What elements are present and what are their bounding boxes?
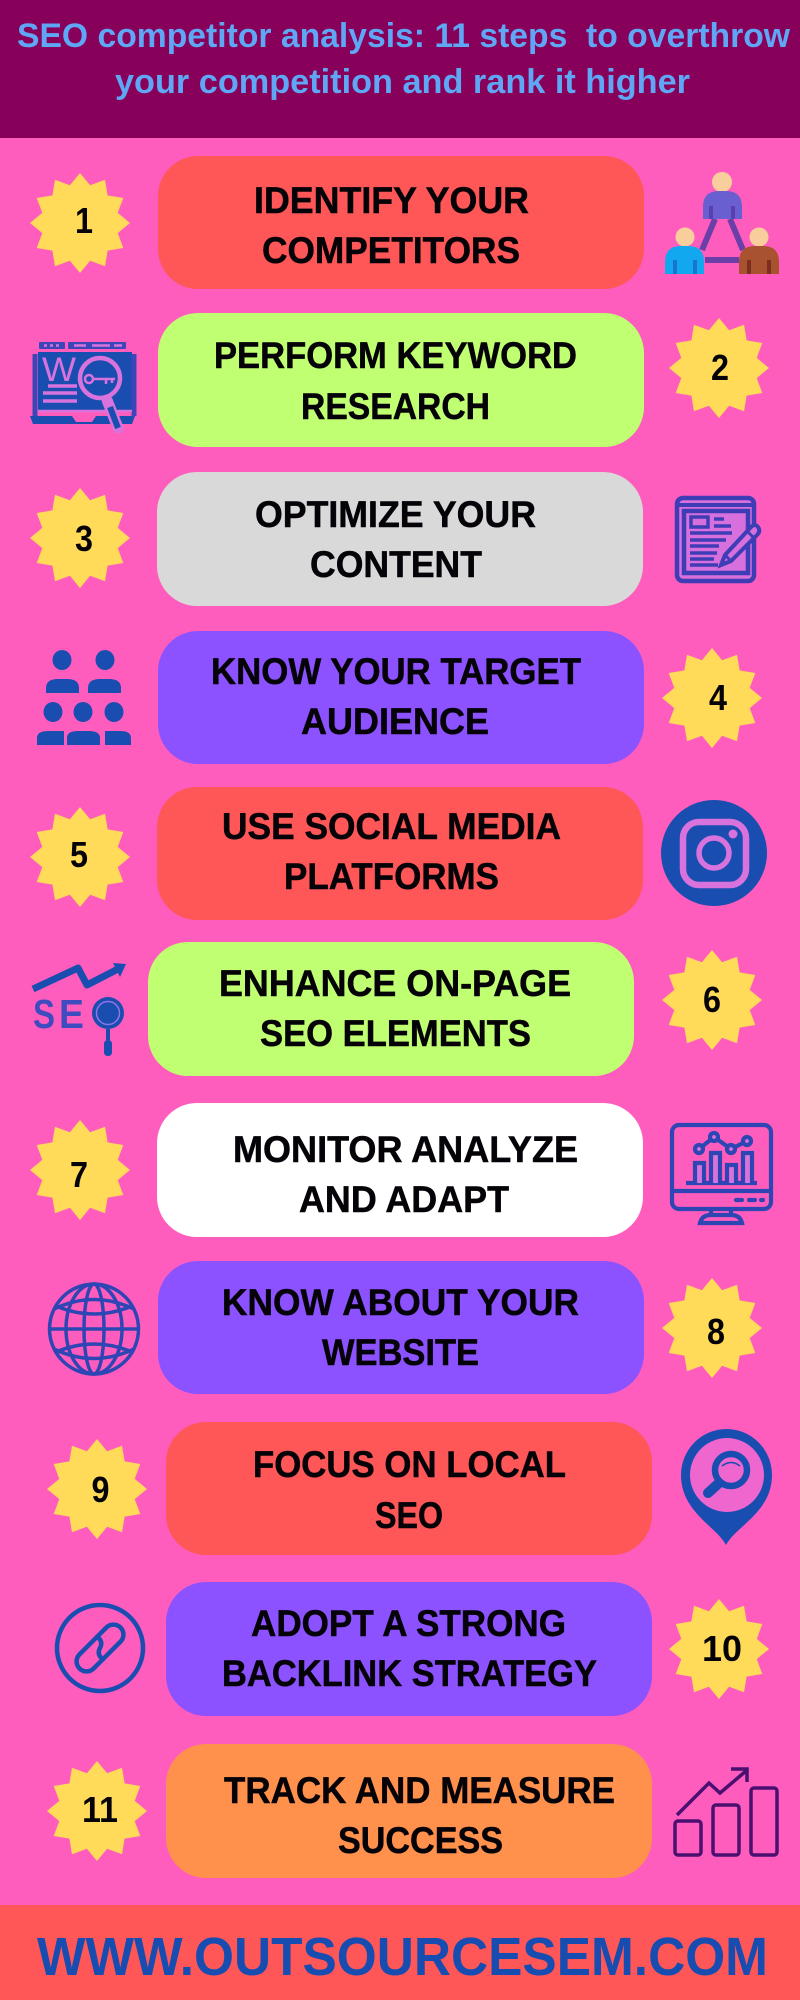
icon: growth bar chart (675, 1769, 777, 1855)
icon: location pin with magnifier (681, 1429, 772, 1545)
step 2 (30, 313, 769, 447)
number badge 10 (669, 1599, 769, 1699)
step 10 (57, 1582, 769, 1716)
pill: track and measure success (166, 1744, 652, 1878)
pill: use social media platforms (157, 787, 643, 920)
number badge 9 (47, 1439, 147, 1539)
pill: know about your website: KNOW ABOUT YOUR (222, 1282, 579, 1323)
pill: monitor analyze and adapt (157, 1103, 643, 1237)
step 8 (50, 1261, 762, 1394)
number badge 5: 5 (70, 834, 88, 875)
pill: adopt a strong backlink strategy: ADOPT A STRONG (251, 1603, 566, 1644)
number badge 11 (47, 1761, 147, 1861)
pill: optimize your content (157, 472, 643, 606)
pill: know your target audience (158, 631, 644, 764)
icon: connected people (665, 172, 779, 274)
header band with title: SEO competitor analysis: 11 steps to overthrow (17, 17, 791, 55)
pill: focus on local seo (166, 1422, 652, 1555)
icon: keyword research laptop: W (42, 351, 76, 389)
icon: document and pencil (677, 498, 759, 581)
icon: globe (50, 1284, 138, 1374)
pill: know your target audience: AUDIENCE (301, 701, 489, 742)
step 3 (30, 472, 759, 606)
number badge 1: 1 (75, 200, 93, 241)
number badge 11: 11 (82, 1789, 118, 1830)
step 1 (30, 156, 779, 289)
pill: track and measure success: TRACK AND MEASURE (224, 1770, 615, 1811)
pill: know about your website (158, 1261, 644, 1394)
pill: optimize your content: CONTENT (310, 544, 482, 585)
icon: chain link in circle (57, 1605, 143, 1691)
number badge 3: 3 (75, 518, 93, 559)
footer band with website url: WWW.OUTSOURCESEM.COM (37, 1927, 768, 1987)
pill: use social media platforms: PLATFORMS (284, 856, 499, 897)
number badge 8 (662, 1278, 762, 1378)
number badge 6 (662, 950, 762, 1050)
number badge 2: 2 (711, 347, 729, 388)
pill: use social media platforms: USE SOCIAL MEDIA (222, 806, 561, 847)
number badge 10: 10 (702, 1628, 742, 1669)
number badge 2 (669, 318, 769, 418)
step 7 (30, 1103, 771, 1237)
pill: identify your competitors (158, 156, 644, 289)
number badge 7 (30, 1120, 130, 1220)
icon: seo growth: E (59, 991, 84, 1037)
pill: know your target audience: KNOW YOUR TARGET (211, 651, 581, 692)
icon: analytics monitor (672, 1125, 771, 1223)
number badge 8: 8 (707, 1311, 725, 1352)
step 9 (47, 1422, 772, 1555)
number badge 5 (30, 807, 130, 907)
number badge 1 (30, 173, 130, 273)
pill: focus on local seo: SEO (375, 1495, 443, 1536)
pill: know about your website: WEBSITE (322, 1332, 479, 1373)
step 11 (47, 1744, 777, 1878)
pill: perform keyword research: PERFORM KEYWORD (214, 335, 577, 376)
pill: perform keyword research: RESEARCH (301, 386, 490, 427)
pill: adopt a strong backlink strategy: BACKLINK STRATEGY (222, 1653, 597, 1694)
footer band with website url (0, 1905, 800, 2000)
icon: audience (37, 650, 131, 745)
number badge 7: 7 (70, 1154, 88, 1195)
pill: optimize your content: OPTIMIZE YOUR (255, 494, 536, 535)
number badge 4: 4 (709, 677, 727, 718)
pill: perform keyword research (158, 313, 644, 447)
step 4 (37, 631, 762, 764)
number badge 6: 6 (703, 979, 721, 1020)
pill: enhance on-page seo elements (148, 942, 634, 1076)
number badge 9: 9 (92, 1469, 110, 1510)
header band with title (0, 0, 800, 138)
pill: focus on local seo: FOCUS ON LOCAL (253, 1444, 566, 1485)
number badge 3 (30, 488, 130, 588)
pill: enhance on-page seo elements: SEO ELEMENTS (260, 1013, 531, 1054)
step 6 (33, 942, 762, 1076)
pill: track and measure success: SUCCESS (338, 1820, 503, 1861)
number badge 4 (662, 648, 762, 748)
icon: seo growth: S (33, 991, 55, 1037)
icon: seo growth (33, 963, 126, 1056)
pill: monitor analyze and adapt: MONITOR ANALYZE (233, 1129, 578, 1170)
step 5 (30, 787, 767, 920)
pill: monitor analyze and adapt: AND ADAPT (299, 1179, 509, 1220)
pill: enhance on-page seo elements: ENHANCE ON-PAGE (219, 963, 571, 1004)
icon: instagram (661, 800, 767, 906)
pill: identify your competitors: IDENTIFY YOUR (254, 180, 529, 221)
pill: adopt a strong backlink strategy (166, 1582, 652, 1716)
header band with title: your competition and rank it higher (115, 63, 690, 101)
icon: keyword research laptop (30, 342, 135, 428)
pill: identify your competitors: COMPETITORS (262, 230, 520, 271)
